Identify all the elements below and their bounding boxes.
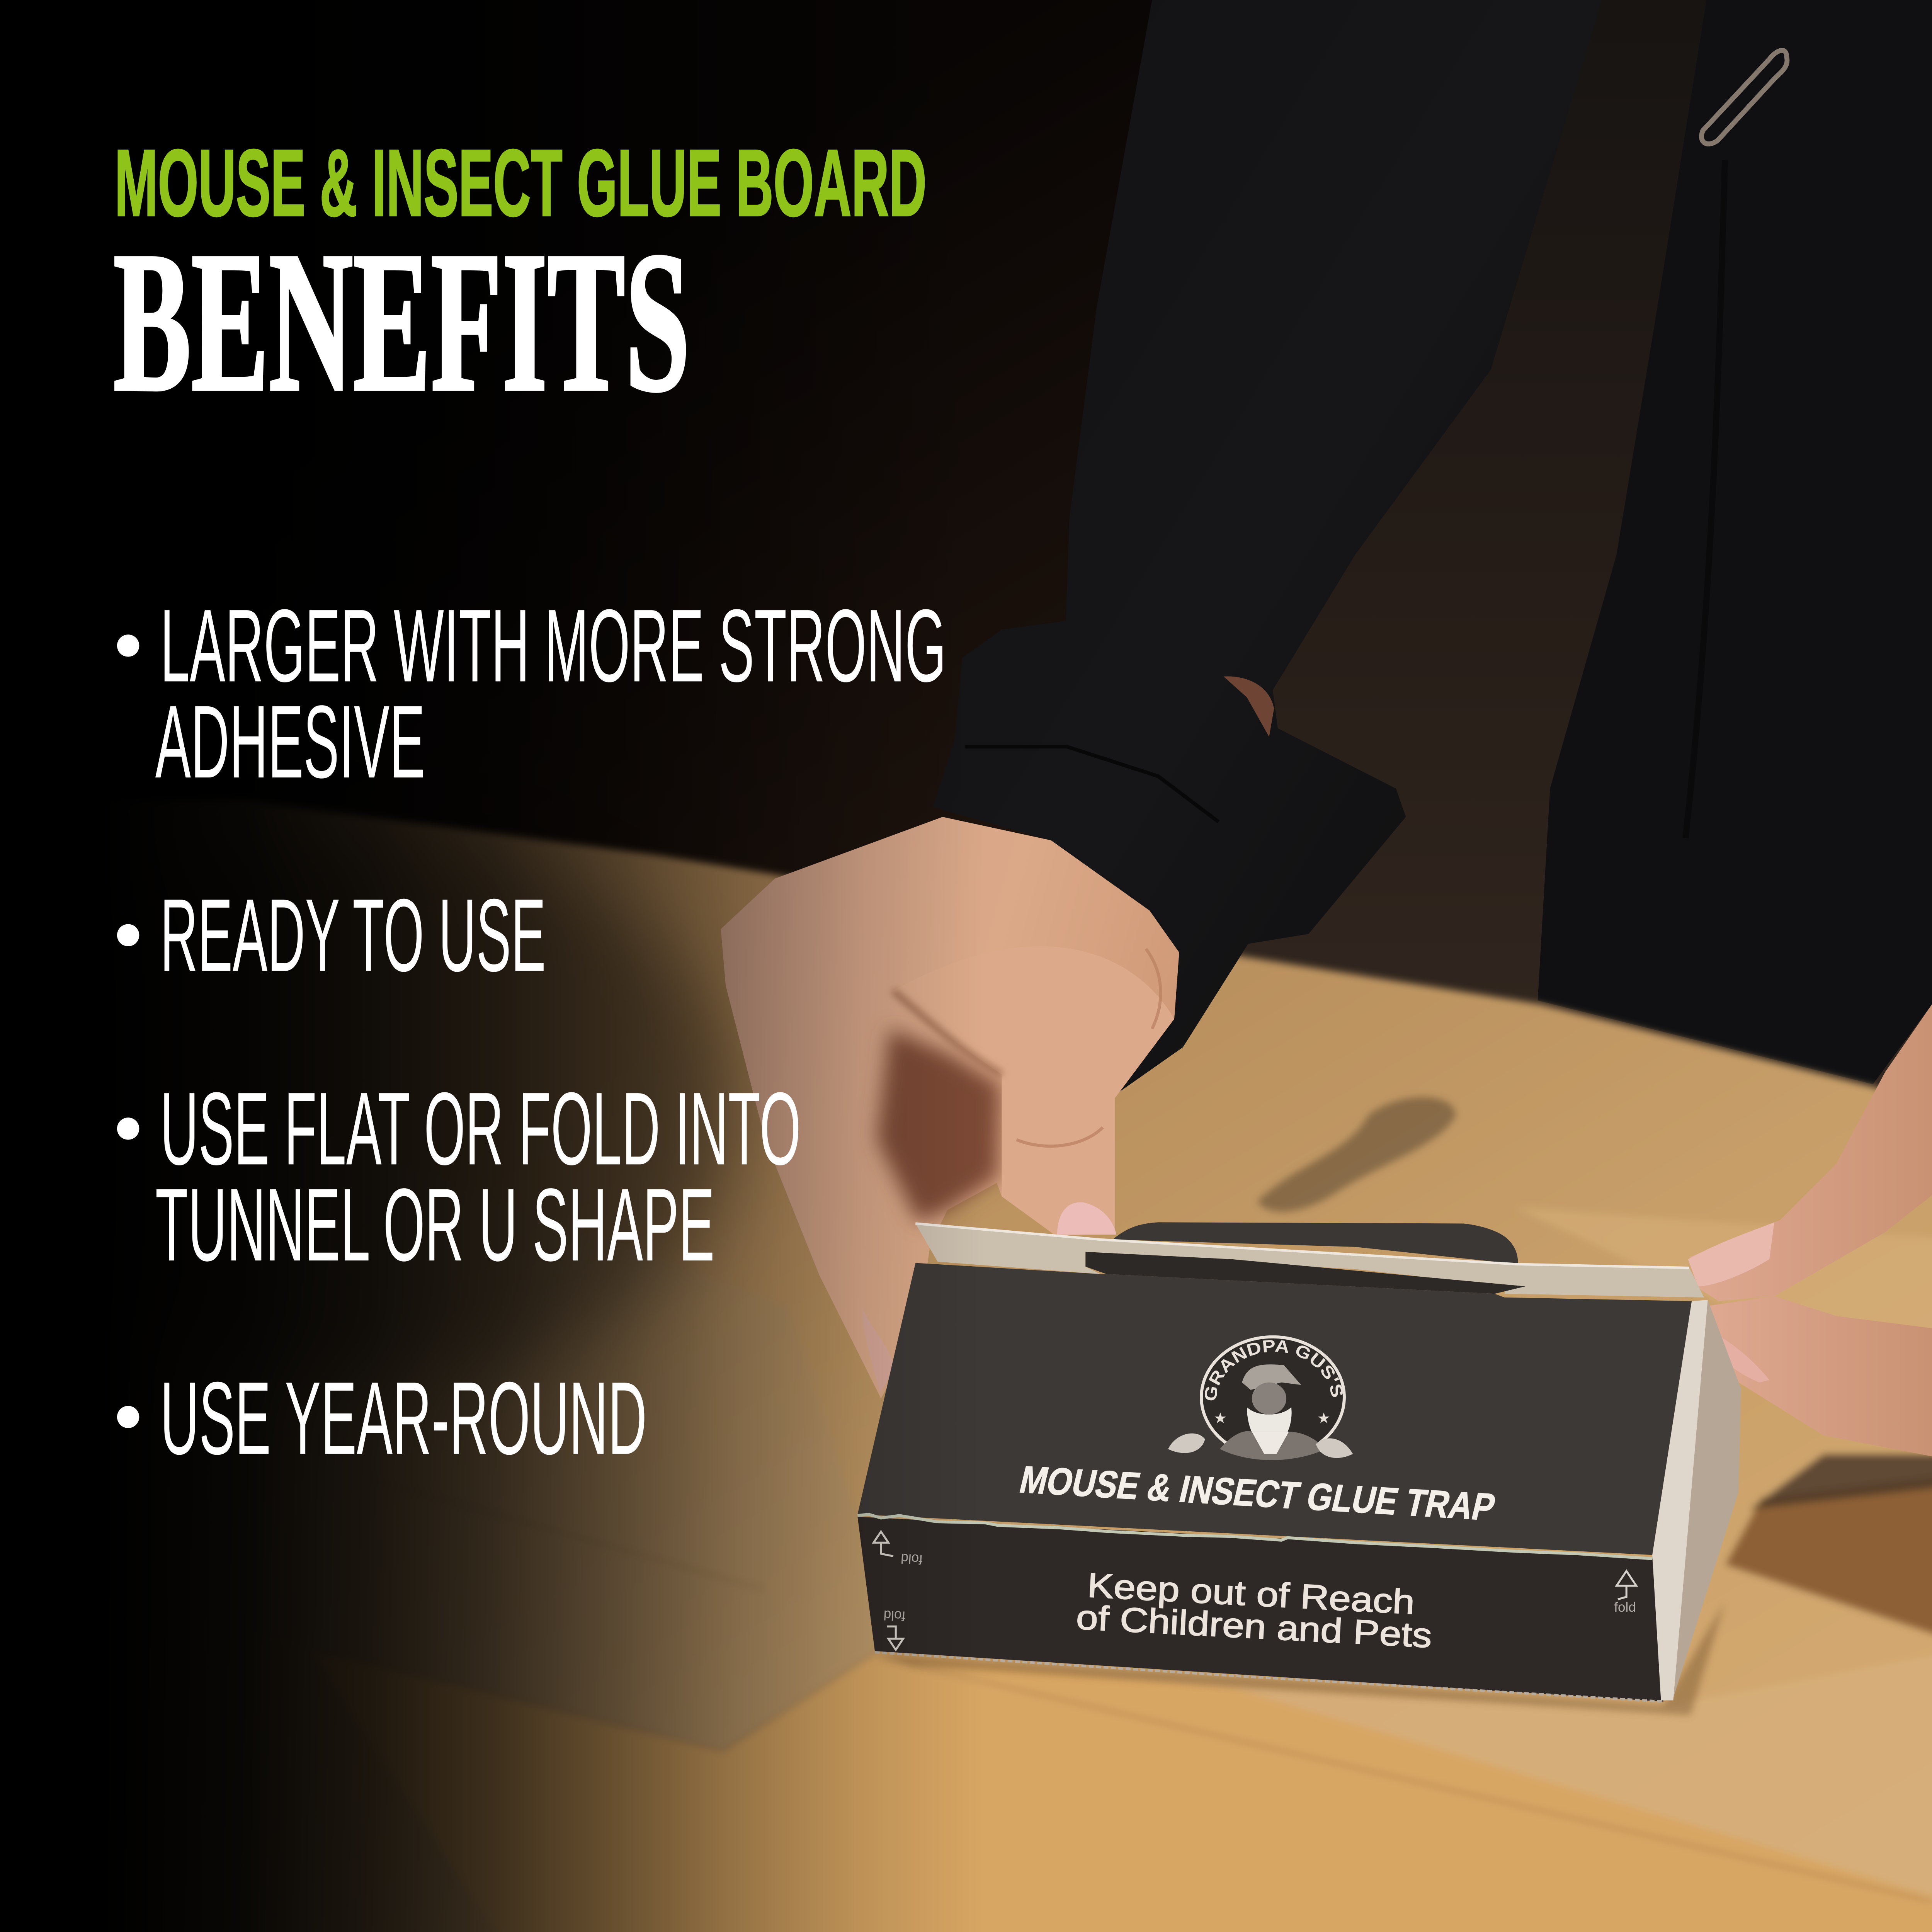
knuckle crease xyxy=(1017,949,1161,1146)
pale right plank xyxy=(1232,1639,1932,1922)
heading: product category: MOUSE & INSECT GLUE BOARD xyxy=(115,130,927,236)
dark grain on right xyxy=(1725,1466,1932,1663)
jacket zipper pull xyxy=(1701,50,1787,144)
orange bottom planks xyxy=(309,1649,1932,1932)
jacket sleeve xyxy=(933,0,1602,1097)
bullet: larger adhesive: ADHESIVE xyxy=(155,684,425,799)
box slot tab xyxy=(1085,1252,1526,1294)
wooden table xyxy=(0,801,1932,1932)
photo background: wall xyxy=(0,0,1932,1109)
logo leaves xyxy=(1168,1434,1353,1458)
bullet: larger adhesive: LARGER WITH MORE STRONG xyxy=(160,588,946,703)
wood stain smudge xyxy=(1257,1097,1456,1212)
bullet: larger adhesive xyxy=(117,588,946,799)
cuff seam xyxy=(965,747,1219,822)
fold label right: fold xyxy=(1614,1600,1636,1615)
box product name: MOUSE & INSECT GLUE TRAP xyxy=(1016,1458,1499,1529)
glue trap box xyxy=(857,1222,1741,1702)
fold arrows xyxy=(874,1532,1636,1650)
bullet: flat or fold xyxy=(117,1071,801,1282)
right hand fingers xyxy=(1688,1004,1932,1456)
heading: benefits: BENEFITS xyxy=(113,211,690,433)
thumb nail xyxy=(1057,1202,1116,1235)
grandpa portrait xyxy=(1220,1364,1326,1460)
upper right lighter wood xyxy=(1515,1208,1932,1368)
bullet: flat or fold: TUNNEL OR U SHAPE xyxy=(155,1167,714,1282)
logo stars: ★ xyxy=(1214,1410,1227,1427)
plank seams xyxy=(309,1479,1932,1901)
palm interior xyxy=(877,1029,1000,1222)
hand crease xyxy=(893,991,1002,1075)
box lower band xyxy=(857,1517,1663,1702)
soft shadow darkening left table xyxy=(0,838,739,1380)
bullet: flat or fold: USE FLAT OR FOLD INTO xyxy=(160,1071,801,1186)
box tear line xyxy=(857,1514,1652,1559)
shadow under box xyxy=(877,1602,1725,1715)
dark fade overlay xyxy=(0,0,986,1932)
box warning line 1: Keep out of Reach xyxy=(1087,1566,1416,1621)
box back tab xyxy=(1112,1222,1518,1264)
bullet: year-round xyxy=(117,1361,647,1476)
thumb xyxy=(893,946,1174,1236)
box top flap xyxy=(915,1223,1704,1298)
thumb hole skin xyxy=(1223,676,1274,737)
jacket body xyxy=(1538,0,1932,1084)
box warning line 2: of Children and Pets xyxy=(1075,1598,1433,1655)
pale plank patch xyxy=(247,1109,879,1751)
box bottom edge xyxy=(875,1652,1663,1702)
bullet: year-round: USE YEAR-ROUND xyxy=(160,1361,647,1476)
box side flap xyxy=(1673,1300,1741,1698)
bullet: ready to use xyxy=(117,878,546,993)
bullet: ready to use: READY TO USE xyxy=(160,878,546,993)
logo badge: ★ xyxy=(1317,1410,1330,1427)
fold label top left: fold xyxy=(900,1551,923,1567)
logo badge: GRANDPA GUS'S xyxy=(1201,1337,1347,1403)
logo badge xyxy=(1168,1337,1353,1460)
left hand xyxy=(721,817,1179,1398)
fold label bottom left: fold xyxy=(883,1607,906,1624)
box flap highlight xyxy=(915,1223,1689,1268)
box front panel xyxy=(857,1263,1692,1555)
box white side edge xyxy=(1652,1300,1708,1701)
finger nail xyxy=(862,1308,895,1392)
